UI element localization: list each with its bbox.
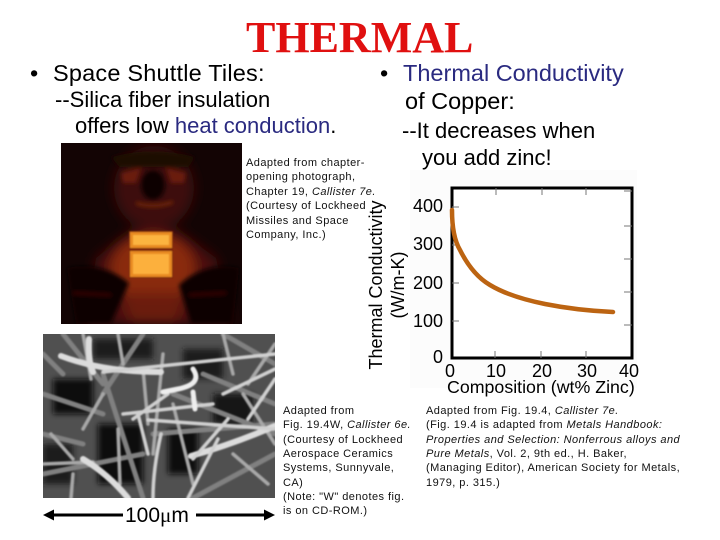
chart: thermal conductivity vs zinc composition (413, 186, 639, 397)
x-axis tick labels: 0 (445, 361, 455, 381)
right text: decreases with zinc: you add zinc! (422, 145, 552, 170)
caption: micrograph credit: Adapted from (283, 405, 354, 417)
caption: copper chart credit (426, 405, 680, 489)
x-axis tick labels: 20 (532, 361, 552, 381)
caption: copper chart credit: Properties and Selection: Nonferrous alloys and (426, 434, 680, 446)
left text: silica fiber insulation (55, 87, 336, 138)
y-axis tick labels (413, 196, 443, 331)
x-axis title: Composition (wt% Zinc) (447, 377, 635, 397)
y-axis tick labels: 300 (413, 234, 443, 254)
scale bar: 100 micrometres: 100μm (125, 503, 189, 527)
photo: silica fiber micrograph (43, 334, 275, 498)
caption: chapter-opening photograph credit: Missiles and Space (246, 215, 349, 227)
left text: silica fiber insulation: offers low heat conduction. (75, 113, 336, 138)
right heading: thermal conductivity of copper: of Copper: (405, 88, 515, 114)
caption: chapter-opening photograph credit (246, 157, 376, 241)
right text: decreases with zinc: --It decreases when (402, 118, 595, 143)
caption: micrograph credit: Aerospace Ceramics (283, 448, 393, 460)
y-axis tick labels: 100 (413, 311, 443, 331)
right heading: thermal conductivity of copper: • (380, 60, 388, 86)
y-axis tick labels: 200 (413, 273, 443, 293)
caption: copper chart credit: Adapted from Fig. 19.4, Callister 7e. (426, 405, 619, 417)
scale bar: 100 micrometres (43, 503, 275, 527)
right heading: thermal conductivity of copper (380, 60, 624, 114)
left text: silica fiber insulation: --Silica fiber insulation (55, 87, 270, 112)
chart plot: frame, ticks and curve (450, 186, 634, 360)
y-axis tick labels: 400 (413, 196, 443, 216)
caption: chapter-opening photograph credit: Adapted from chapter- (246, 157, 365, 169)
caption: chapter-opening photograph credit: opening photograph, (246, 171, 355, 183)
caption: micrograph credit: (Courtesy of Lockheed (283, 434, 403, 446)
caption: copper chart credit: Pure Metals, Vol. 2, 9th ed., H. Baker, (426, 448, 627, 460)
caption: copper chart credit: (Fig. 19.4 is adapted from Metals Handbook: (426, 419, 662, 431)
caption: micrograph credit (283, 405, 411, 517)
caption: chapter-opening photograph credit: Company, Inc.) (246, 229, 326, 241)
right text: decreases with zinc (402, 118, 595, 170)
caption: micrograph credit: Systems, Sunnyvale, (283, 462, 394, 474)
caption: chapter-opening photograph credit: Chapter 19, Callister 7e. (246, 186, 376, 198)
left heading: space shuttle tiles: Space Shuttle Tiles: (53, 60, 265, 86)
caption: chapter-opening photograph credit: (Courtesy of Lockheed (246, 200, 366, 212)
caption: micrograph credit: Fig. 19.4W, Callister 6e. (283, 419, 411, 431)
y-axis title (366, 200, 408, 370)
caption: micrograph credit: (Note: "W" denotes fig. (283, 491, 404, 503)
x-axis tick labels: 10 (486, 361, 506, 381)
left heading: space shuttle tiles: • (30, 60, 38, 86)
x-axis tick labels: 30 (577, 361, 597, 381)
x-axis tick labels (433, 347, 639, 381)
x-axis tick labels: 40 (619, 361, 639, 381)
photo: glowing shuttle tile held by person (61, 143, 242, 324)
y-axis title: Thermal Conductivity (366, 200, 386, 370)
caption: micrograph credit: is on CD-ROM.) (283, 505, 368, 517)
right heading: thermal conductivity of copper: Thermal Conductivity (403, 60, 624, 86)
y-axis title: (W/m-K) (388, 252, 408, 318)
caption: copper chart credit: 1979, p. 315.) (426, 477, 500, 489)
caption: copper chart credit: (Managing Editor), American Society for Metals, (426, 462, 680, 474)
title: THERMAL (246, 13, 473, 62)
caption: micrograph credit: CA) (283, 477, 303, 489)
x-axis tick labels: 0 (433, 347, 443, 367)
